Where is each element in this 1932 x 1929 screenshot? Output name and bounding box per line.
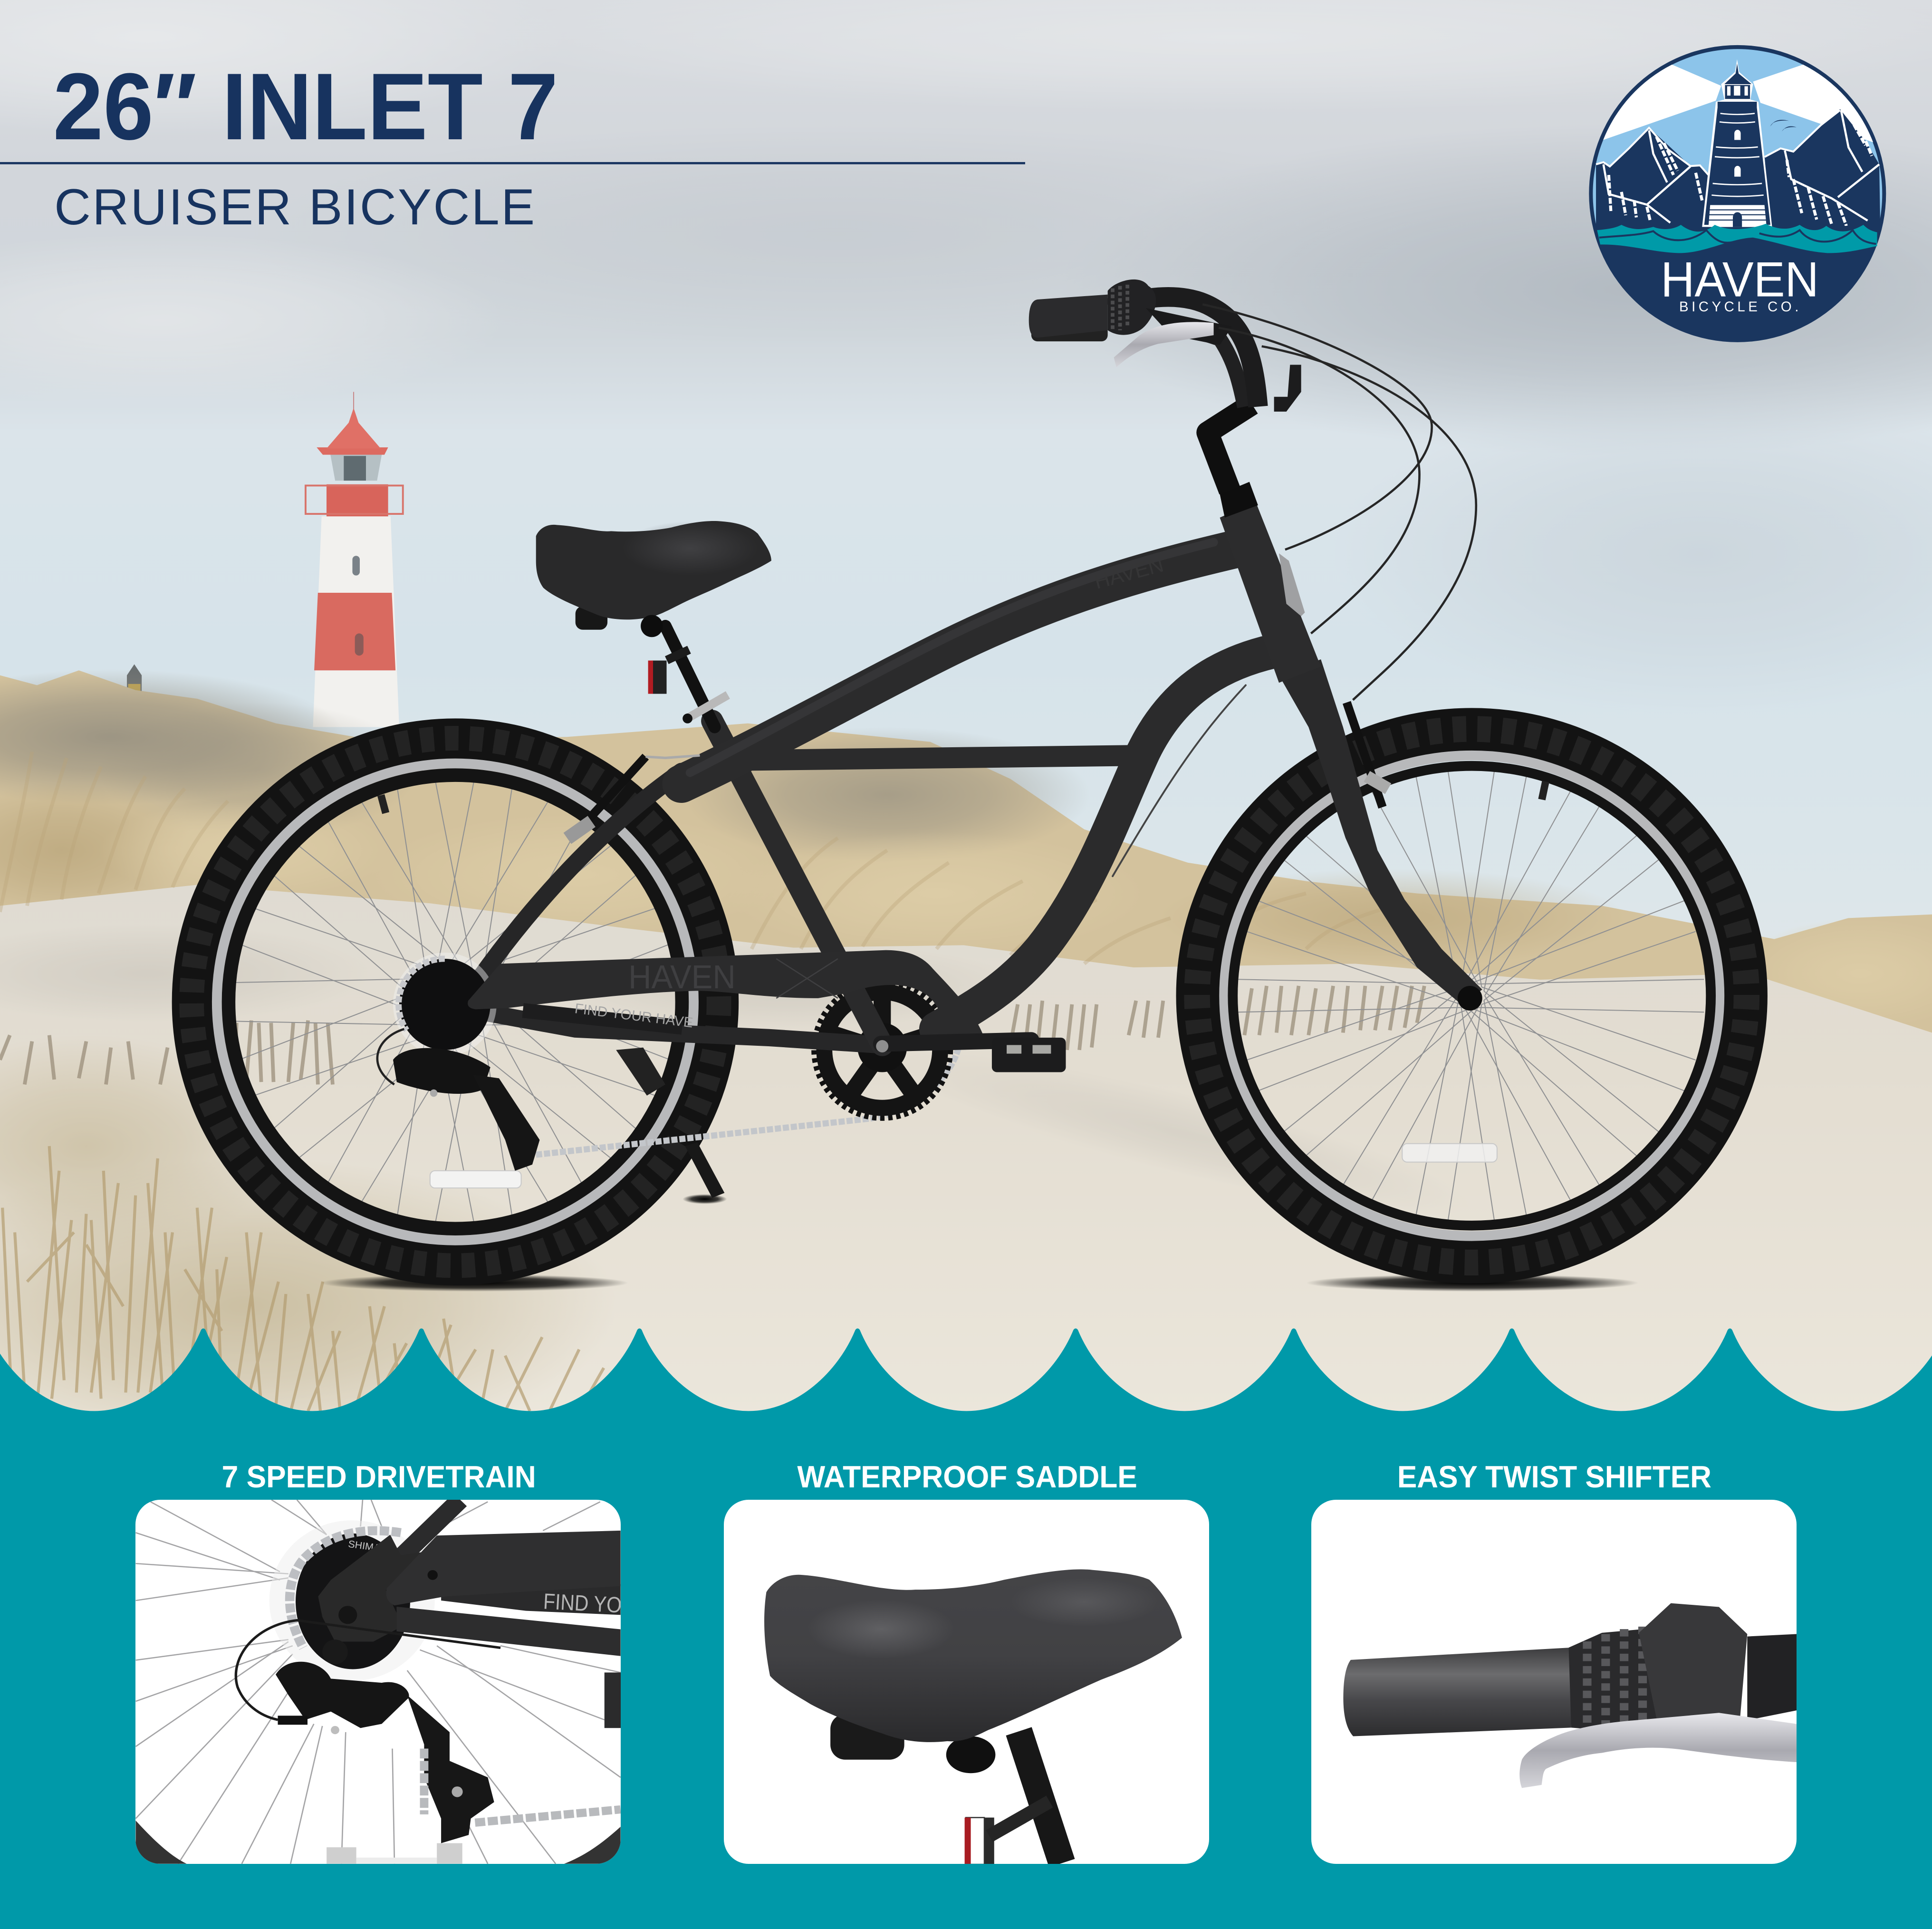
- shifter: [1108, 280, 1156, 335]
- logo: Haven Bicycle Co.: [1568, 29, 1901, 361]
- logo lower field: [1596, 226, 1879, 338]
- saddle: [536, 521, 771, 637]
- title: 26″ INLET 7: [53, 54, 558, 160]
- seat stay: [472, 772, 682, 990]
- post clamp: [946, 1736, 995, 1773]
- rear reflector: [430, 1171, 521, 1188]
- seat clamp: [682, 691, 730, 723]
- rear seat reflector: [648, 646, 691, 694]
- grip: [1029, 295, 1108, 338]
- logo badge disc: [1589, 45, 1886, 342]
- reflector: [327, 1843, 462, 1864]
- guard bolts: [428, 1570, 438, 1580]
- pedal: [992, 1038, 1066, 1072]
- chain stay: [396, 1607, 621, 1656]
- inner guard lettering: FIND YOUR HAVE: [574, 1001, 694, 1031]
- rim arcs: [136, 1821, 621, 1864]
- dropout: [318, 1535, 428, 1642]
- crank bolt: [876, 1040, 888, 1052]
- cassette: [393, 953, 497, 1056]
- grip: [1343, 1648, 1571, 1736]
- beach grass: [0, 752, 1424, 1411]
- chain guard: [386, 1531, 621, 1605]
- cable: [236, 1620, 500, 1720]
- stand fragment: [605, 1672, 621, 1728]
- fork: [1279, 659, 1482, 1004]
- logo lighthouse: [1702, 59, 1772, 227]
- brake lever: [1519, 1713, 1797, 1788]
- logo light beams: [1603, 65, 1873, 142]
- panel: saddle close-up: [724, 1500, 1209, 1864]
- bicycle: [192, 280, 1747, 1292]
- rear brake: [564, 755, 700, 844]
- head tube: [1220, 502, 1321, 683]
- top tube: [682, 549, 1238, 784]
- subtitle: CRUISER BICYCLE: [54, 179, 535, 235]
- brake and shifter cables: [1202, 304, 1476, 700]
- distant marker post: [127, 664, 142, 694]
- clouds: [0, 0, 1932, 715]
- inner guard lettering: [522, 1001, 694, 1034]
- middle bar: [739, 755, 1140, 761]
- front hub: [1458, 986, 1482, 1011]
- far handlebar strand: [1171, 323, 1244, 407]
- background beach scene: [0, 0, 1932, 1454]
- down tube: [936, 649, 1281, 1029]
- front brake: [1347, 703, 1391, 807]
- far grip: [1031, 325, 1108, 341]
- seat stay: [394, 1500, 460, 1563]
- brake lever: [1114, 322, 1214, 367]
- chain stay: [474, 1011, 882, 1045]
- sand: [0, 885, 1932, 1454]
- reflector bracket: [1274, 365, 1301, 412]
- axle nut: [338, 1606, 357, 1624]
- knurled twist shifter: [1569, 1627, 1676, 1730]
- panel: drivetrain close-up: [135, 1500, 621, 1864]
- top tube lettering: HAVEN: [1092, 553, 1166, 594]
- chain: [536, 1048, 959, 1155]
- feature heading: waterproof saddle: WATERPROOF SADDLE: [797, 1459, 1137, 1494]
- derailleur: [276, 1640, 494, 1843]
- sky: [0, 0, 1932, 986]
- rear derailleur: [377, 1029, 540, 1171]
- spoke protector: [269, 1520, 435, 1681]
- feature heading: 7 speed drivetrain: 7 SPEED DRIVETRAIN: [222, 1459, 536, 1494]
- logo waves: [1597, 224, 1877, 253]
- cassette: [290, 1531, 410, 1669]
- shifter body: [1639, 1603, 1747, 1723]
- stem: [1208, 404, 1252, 491]
- seat post: [1019, 1731, 1062, 1863]
- reflector: [965, 1802, 1049, 1864]
- dunes: [0, 669, 1932, 1035]
- brake lever mount: [1146, 308, 1232, 345]
- chain guard logo text: HAVEN: [628, 958, 736, 995]
- frame: [472, 542, 1281, 1045]
- logo tagline: BICYCLE CO.: [1679, 299, 1798, 315]
- handlebar: [1109, 297, 1258, 407]
- logo right mountain: [1765, 109, 1880, 230]
- chain guard: [468, 950, 983, 1035]
- saddle: [764, 1569, 1182, 1742]
- front reflector: [1402, 1144, 1497, 1162]
- headset: [1220, 482, 1258, 518]
- spokes: [136, 1500, 621, 1864]
- seat post: [665, 626, 715, 727]
- head badge: [1279, 553, 1305, 616]
- springs: [830, 1714, 904, 1760]
- front wheel: [1197, 729, 1747, 1263]
- feature heading: easy twist shifter: EASY TWIST SHIFTER: [1397, 1459, 1711, 1494]
- title rule: [0, 162, 1025, 164]
- logo sky: [1593, 49, 1882, 226]
- wheel shadows: [320, 1194, 1639, 1292]
- clamp: [1747, 1634, 1797, 1720]
- lettered band: [441, 1584, 622, 1618]
- panel: twist shifter close-up: [1311, 1500, 1797, 1864]
- lighthouse: [306, 392, 403, 727]
- kickstand: [616, 1048, 724, 1198]
- chain: [424, 1748, 621, 1823]
- teal wave footer: [0, 1331, 1932, 1925]
- seat tube: [712, 721, 882, 1045]
- cassette: SHIMANO: [347, 1539, 396, 1556]
- crank arm: [881, 1040, 1031, 1044]
- chainring: [815, 982, 950, 1118]
- rear wheel: [192, 738, 719, 1265]
- logo birds: [1770, 120, 1797, 132]
- logo wordmark: HAVEN: [1661, 251, 1819, 307]
- logo left mountain: [1596, 128, 1710, 230]
- chain guard cross mark: [776, 959, 838, 998]
